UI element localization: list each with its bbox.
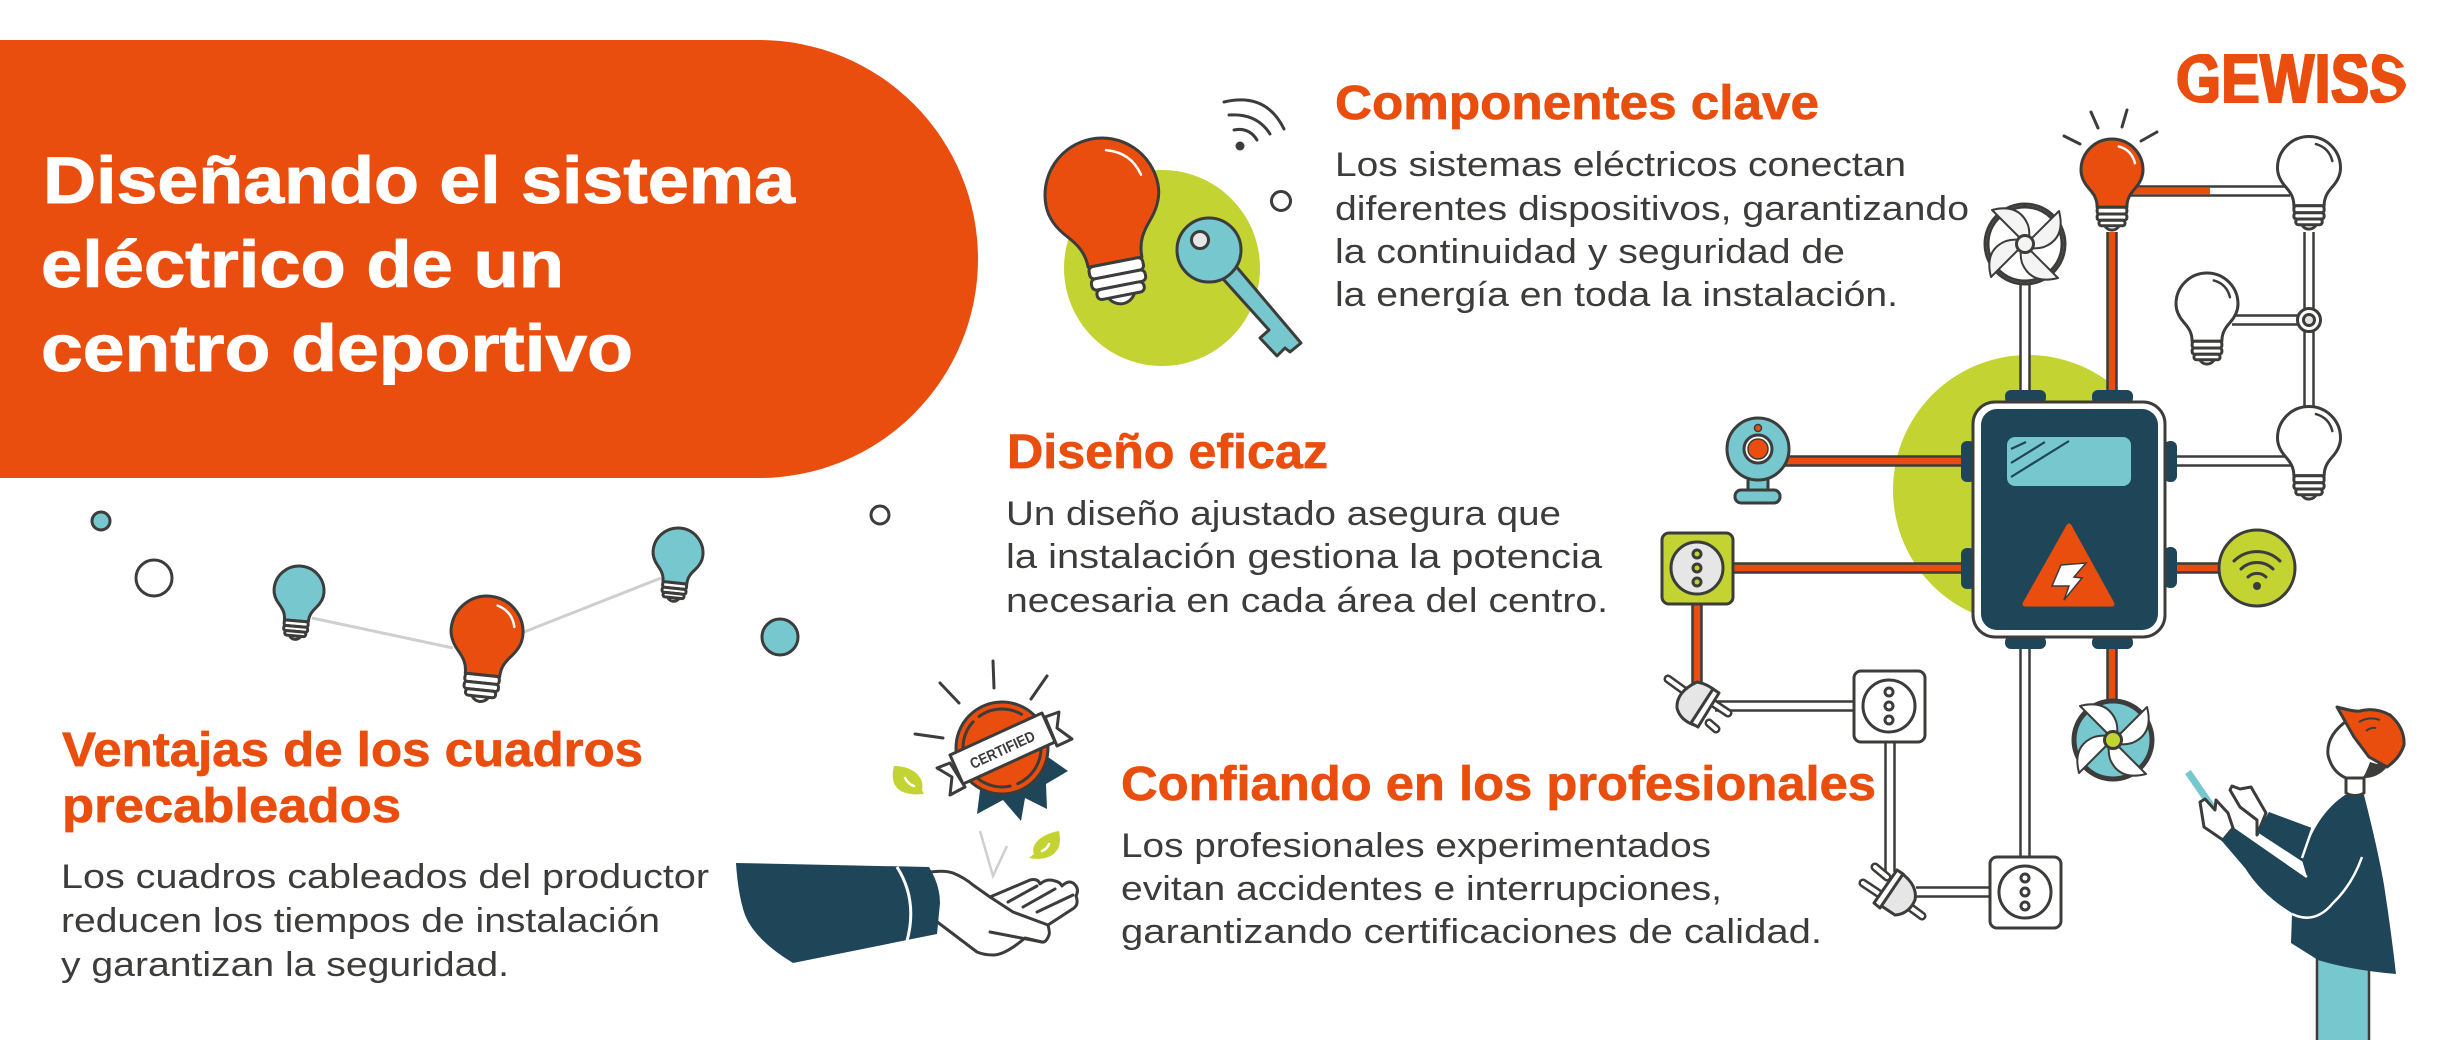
text block: Un diseño ajustado asegura que	[1006, 495, 1561, 533]
title	[41, 143, 796, 385]
heading: Ventajas de los cuadros	[62, 724, 643, 777]
icon: bulb top right	[2278, 136, 2340, 229]
text block: necesaria en cada área del centro.	[1006, 582, 1608, 620]
text block: la continuidad y seguridad de	[1335, 233, 1845, 271]
heading: Confiando en los profesionales	[1121, 758, 1876, 811]
icon: phone	[2188, 772, 2212, 807]
text block: evitan accidentes e interrupciones,	[1121, 870, 1722, 908]
panel: diseño eficaz	[1006, 426, 1608, 620]
heading	[62, 724, 643, 833]
text block: garantizando certificaciones de calidad.	[1121, 913, 1822, 951]
panel: confiando en los profesionales	[1121, 758, 1876, 951]
icon: bulb lower right	[2278, 406, 2340, 499]
panel: componentes clave	[1335, 77, 1969, 314]
title: Diseñando el sistema	[43, 143, 796, 217]
icon: legs	[2317, 950, 2369, 1040]
text block	[1121, 827, 1822, 951]
title: eléctrico de un	[41, 227, 564, 301]
icon: person with cap and phone	[2188, 707, 2404, 1040]
text block	[1335, 146, 1969, 314]
icon: ribbon: CERTIFIED	[967, 728, 1038, 773]
icon: neck and head	[2328, 720, 2387, 796]
diagram: electrical installation	[1662, 110, 2340, 928]
icon: wifi device	[2219, 530, 2295, 606]
text block	[61, 858, 709, 984]
wires: orange	[1697, 191, 2222, 702]
heading: precableados	[62, 780, 401, 833]
icon: socket lower	[1990, 857, 2061, 928]
icon: fan bottom	[2074, 701, 2152, 779]
text block: Los cuadros cableados del productor	[61, 858, 709, 896]
text block: la energía en toda la instalación.	[1335, 276, 1898, 314]
icon: leaf	[893, 766, 924, 794]
icon: wifi signal	[1224, 100, 1284, 150]
text block: diferentes dispositivos, garantizando	[1335, 190, 1969, 228]
panel: ventajas de los cuadros precableados	[61, 724, 709, 984]
icon: fan top	[1985, 204, 2065, 284]
icon: medal	[956, 702, 1048, 794]
icon: socket upper	[1854, 671, 1925, 742]
text block: Los sistemas eléctricos conectan	[1335, 146, 1906, 184]
panel: electrical box	[1973, 402, 2165, 637]
icon: display	[2007, 437, 2131, 486]
icon: hands	[2200, 786, 2266, 840]
heading: Componentes clave	[1335, 77, 1819, 130]
text block: Los profesionales experimentados	[1121, 827, 1711, 865]
icon: hand with certified badge	[736, 661, 1077, 963]
wires: white	[1715, 191, 2309, 892]
icon: rays	[915, 661, 1047, 738]
icon: connectors	[1961, 390, 2177, 649]
icon: leaf	[1029, 831, 1060, 859]
heading: Diseño eficaz	[1007, 426, 1328, 479]
icon: hand	[930, 871, 1077, 955]
text block	[1006, 495, 1608, 620]
text block: la instalación gestiona la potencia	[1006, 538, 1602, 576]
icon: webcam	[1727, 418, 1789, 503]
icon: lit bulb	[2064, 110, 2157, 230]
icon: key	[1177, 218, 1301, 356]
icon: bulb and key	[1035, 100, 1301, 366]
text block: y garantizan la seguridad.	[61, 946, 509, 984]
icon: plug upper	[1668, 679, 1728, 729]
icon: torso	[2221, 795, 2396, 974]
text block: reducen los tiempos de instalación	[61, 902, 660, 940]
icon: bulb middle	[2176, 273, 2238, 364]
icon: warning triangle	[2025, 526, 2112, 604]
icon: cap	[2337, 707, 2404, 767]
panel: title banner	[0, 40, 978, 478]
icon: sleeve	[736, 863, 940, 963]
icon: rosette	[977, 757, 1068, 821]
icon: big bulb	[1035, 128, 1179, 314]
title: centro deportivo	[41, 311, 633, 385]
icon: connected bulbs	[92, 506, 889, 705]
icon: plug lower	[1863, 867, 1922, 916]
icon: junction	[2298, 308, 2320, 332]
icon: ribbon	[937, 712, 1072, 795]
icon: green socket	[1662, 533, 1733, 604]
